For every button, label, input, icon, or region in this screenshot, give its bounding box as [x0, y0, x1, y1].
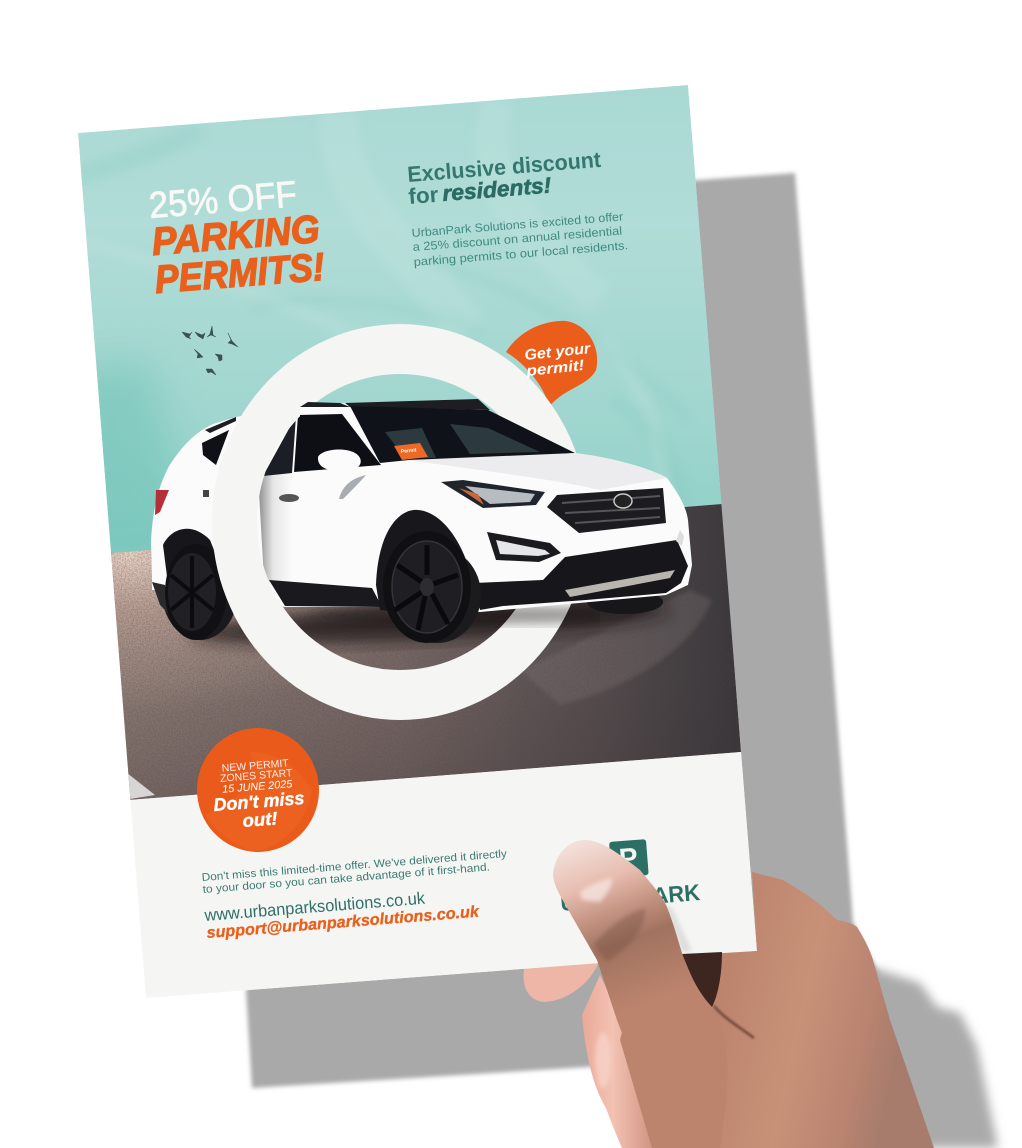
badge: don't miss out: [192, 723, 324, 857]
white band: [129, 752, 757, 998]
logo: [559, 839, 701, 916]
shadow between thumb and hand: [682, 952, 722, 1007]
badge date text: NEW PERMIT: [221, 757, 290, 775]
front wheel: [376, 510, 481, 643]
index fingertip behind flyer: [524, 960, 600, 1002]
road ground: [105, 500, 745, 810]
thumb nail highlight: [580, 878, 612, 902]
cast shadow of hand: [860, 968, 998, 1148]
side skirt: [269, 580, 382, 607]
flyer: [60, 80, 757, 998]
website url: www.urbanparksolutions.co.uk: [203, 889, 426, 925]
bird: [207, 326, 216, 337]
sky swirl bands: [437, 304, 668, 480]
blob text: [524, 340, 592, 380]
intro paragraph: UrbanPark Solutions is excited to offer: [411, 209, 624, 240]
support email: support@urbanparksolutions.co.uk: [206, 904, 481, 942]
bird: [195, 332, 205, 339]
car far front wheel: [587, 590, 663, 614]
bird: [206, 369, 216, 375]
badge headline: Don't miss: [213, 788, 305, 815]
car: [151, 399, 692, 643]
car roof: [205, 399, 490, 433]
parking permit sticker: Permit: [401, 447, 417, 455]
mirror shadow: [339, 475, 366, 499]
headline: 25% off: 25% OFF: [147, 173, 298, 226]
parking permit sticker: [394, 443, 428, 460]
paper shadow near thumb: [666, 906, 692, 952]
lower bumper: [474, 540, 688, 610]
paper base: [250, 182, 757, 990]
bird: [228, 333, 238, 347]
tail light: [155, 490, 169, 515]
hand: [553, 840, 934, 1148]
finger highlight: [595, 1032, 611, 1088]
cast shadow of flyer: [246, 173, 880, 1088]
car windshield: [350, 406, 575, 463]
bird: [194, 349, 203, 358]
rear door handle: [203, 490, 209, 497]
car grille: [547, 488, 666, 533]
thumb knuckle creases: [593, 908, 645, 962]
closing message: Don't miss this limited-time offer. We've delivered it directly: [201, 848, 508, 884]
car body: [151, 403, 692, 612]
birds: [182, 326, 238, 375]
white ring graphic: [212, 324, 588, 720]
car ground shadow: [189, 592, 671, 652]
logo icon: [609, 839, 649, 878]
intro paragraph: a 25% discount on annual residential: [412, 224, 623, 254]
speech blob: get your permit: [506, 321, 597, 407]
car rear wheel tyre: [162, 544, 238, 640]
door handle: [279, 494, 299, 502]
shadow falling on ring: [310, 606, 650, 624]
subheading: for residents: for: [407, 182, 440, 209]
lower fingers: [582, 975, 660, 1148]
car wing mirror: [318, 450, 361, 471]
badge date text: ZONES START: [220, 767, 293, 785]
badge date text: 15 JUNE 2025: [222, 778, 294, 796]
car headlight: [441, 480, 545, 508]
front side marker: [676, 530, 684, 546]
closing message: to your door so you can take advantage of it first-hand.: [202, 861, 490, 896]
headline: parking: PARKING: [150, 208, 321, 264]
teal sky panel: [78, 85, 722, 553]
subheading: exclusive discount: Exclusive discount: [406, 147, 602, 187]
bird: [215, 354, 222, 361]
headline: permits: PERMITS!: [153, 246, 326, 302]
car rear bumper dark: [152, 582, 170, 615]
closing message: [201, 848, 508, 896]
badge headline line 2: out!: [242, 808, 278, 831]
car rear quarter window: [202, 430, 229, 465]
ring foreground arc over car: [214, 354, 300, 690]
logo icon: P: [618, 842, 639, 874]
intro paragraph: [411, 209, 629, 269]
badge date text: [220, 757, 294, 796]
bird: [182, 332, 192, 339]
badge accent: [205, 752, 312, 851]
hood line: [409, 453, 667, 490]
thumb: [553, 840, 728, 1148]
intro paragraph: parking permits to our local residents.: [413, 238, 629, 269]
back of hand: [620, 872, 934, 1148]
fog lamp: [487, 532, 561, 562]
car side windows: [294, 414, 381, 472]
hand crease: [714, 1006, 754, 1038]
subheading: for residents: [407, 173, 552, 209]
logo wordmark: URBANPARK: [559, 879, 701, 916]
car door shading: [258, 473, 292, 590]
blob text: permit!: [525, 357, 585, 380]
blob text: Get your: [524, 340, 592, 364]
rear wheel: [163, 529, 230, 640]
subheading: for residents: residents!: [441, 173, 552, 206]
